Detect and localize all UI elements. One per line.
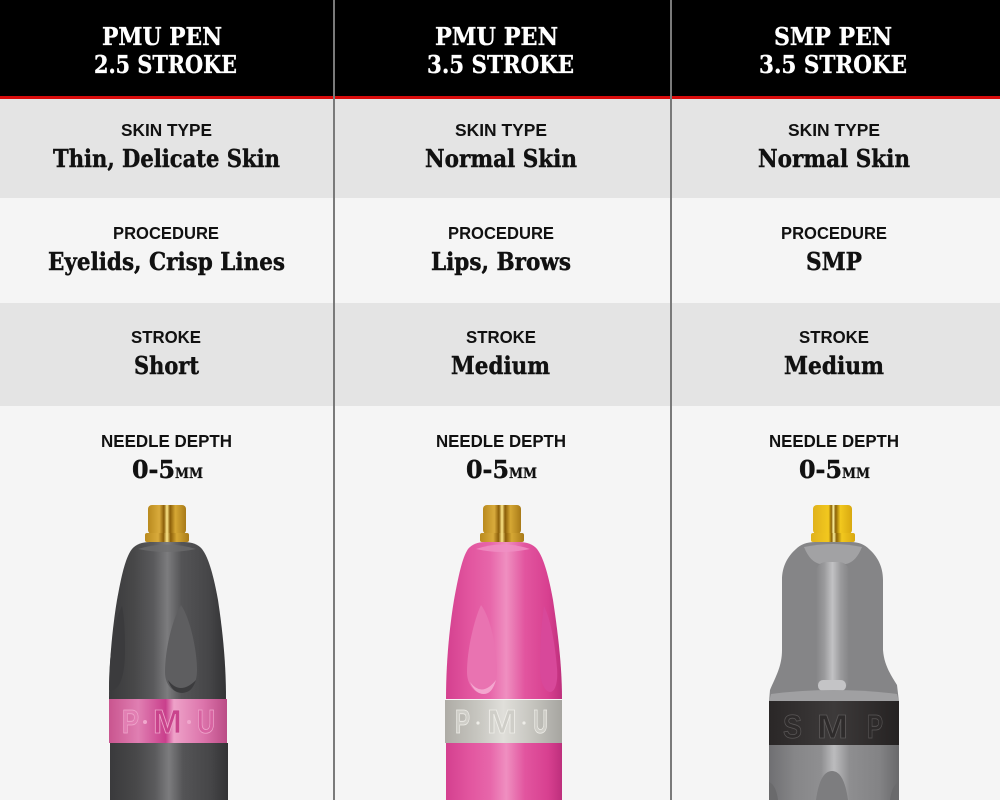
pen: dark grey with pink ring: M: [153, 703, 182, 740]
skin type: SKIN TYPE: [788, 120, 880, 140]
pen: pink with silver ring: P: [455, 703, 470, 740]
procedure: Lips, Brows: [431, 247, 571, 276]
pen: dark grey with pink ring: P: [122, 703, 139, 740]
needle depth: [436, 431, 566, 484]
row band: procedure: [0, 198, 1000, 303]
stroke: STROKE: [131, 327, 201, 347]
stroke: STROKE: [466, 327, 536, 347]
needle depth: [101, 431, 232, 484]
pen: dark grey with pink ring: [109, 505, 228, 800]
pen: pink with silver ring: U: [533, 703, 548, 740]
procedure: [431, 223, 571, 276]
row band: stroke: [0, 303, 1000, 406]
skin type: [425, 120, 577, 173]
skin type: Normal Skin: [425, 144, 577, 173]
pen: silver with black ring: [769, 505, 899, 800]
needle depth: MM: [842, 466, 870, 482]
procedure: PROCEDURE: [781, 223, 887, 243]
heading: PMU pen 3.5 stroke: PMU PEN: [435, 22, 558, 51]
heading: SMP pen 3.5 stroke: SMP PEN: [774, 22, 892, 51]
stroke: [131, 327, 201, 380]
pen: silver with black ring: P: [867, 708, 883, 745]
skin type: Thin, Delicate Skin: [53, 144, 280, 173]
pen: dark grey with pink ring: U: [197, 703, 215, 740]
heading: PMU pen 3.5 stroke: 3.5 STROKE: [427, 50, 574, 79]
skin type: Normal Skin: [758, 144, 910, 173]
column 1: PMU pen 2.5 stroke: [48, 22, 285, 800]
needle depth: NEEDLE DEPTH: [436, 431, 566, 451]
pen: silver with black ring: S: [783, 708, 802, 745]
procedure: SMP: [806, 247, 862, 276]
stroke: [451, 327, 550, 380]
needle depth: MM: [509, 466, 537, 482]
pen: pink with silver ring: M: [487, 703, 517, 740]
procedure: [781, 223, 887, 276]
row band: skin type: [0, 99, 1000, 198]
needle depth: [769, 431, 899, 484]
heading: PMU pen 3.5 stroke: [427, 22, 574, 79]
header band: [0, 0, 1000, 96]
procedure: [48, 223, 285, 276]
column 3: SMP pen 3.5 stroke: [758, 22, 910, 800]
heading: SMP pen 3.5 stroke: 3.5 STROKE: [759, 50, 907, 79]
procedure: PROCEDURE: [448, 223, 554, 243]
needle depth: NEEDLE DEPTH: [769, 431, 899, 451]
needle depth: MM: [175, 466, 203, 482]
red accent line: [0, 96, 1000, 99]
procedure: Eyelids, Crisp Lines: [48, 247, 285, 276]
heading: SMP pen 3.5 stroke: [759, 22, 907, 79]
heading: PMU pen 2.5 stroke: [94, 22, 237, 79]
stroke: [784, 327, 884, 380]
pen: silver with black ring: M: [817, 708, 848, 745]
stroke: Short: [134, 351, 199, 380]
skin type: [758, 120, 910, 173]
needle depth: 0-5: [799, 455, 842, 484]
stroke: Medium: [451, 351, 550, 380]
column 2: PMU pen 3.5 stroke: [425, 22, 577, 800]
row band: needle depth: [0, 406, 1000, 800]
heading: PMU pen 2.5 stroke: PMU PEN: [102, 22, 222, 51]
skin type: [53, 120, 280, 173]
needle depth: NEEDLE DEPTH: [101, 431, 232, 451]
pen: pink with silver ring: [445, 505, 562, 800]
needle depth: 0-5: [132, 455, 175, 484]
needle depth: 0-5: [466, 455, 509, 484]
skin type: SKIN TYPE: [455, 120, 547, 140]
procedure: PROCEDURE: [113, 223, 219, 243]
heading: PMU pen 2.5 stroke: 2.5 STROKE: [94, 50, 237, 79]
stroke: STROKE: [799, 327, 869, 347]
skin type: SKIN TYPE: [121, 120, 212, 140]
stroke: Medium: [784, 351, 884, 380]
